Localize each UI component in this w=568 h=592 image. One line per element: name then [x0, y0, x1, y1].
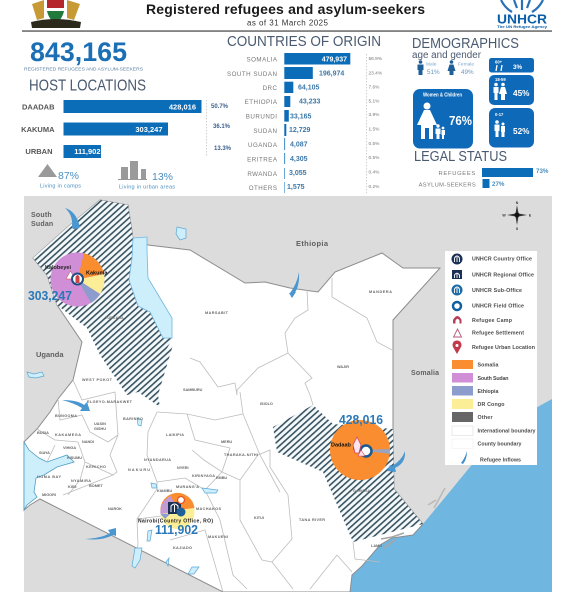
- county labels: KIAMBU: [157, 489, 172, 493]
- bar chart: countries of origin: 0.5%: [368, 155, 380, 161]
- panel: demographics: [412, 36, 534, 148]
- county labels: KAKAMEGA: [55, 433, 81, 437]
- pie: Dadaab: 428,016: [339, 412, 383, 427]
- card: age 0-17: 52%: [513, 126, 530, 136]
- pie: Kakuma: [28, 252, 108, 306]
- stat: male: 51%: [427, 69, 440, 76]
- bar chart: countries of origin: 12,729: [289, 127, 311, 134]
- legend: labels: [472, 256, 536, 464]
- county boundaries: [37, 278, 392, 592]
- county labels: NAROK: [108, 507, 122, 511]
- county labels: MARSABIT: [205, 311, 229, 315]
- country labels: South: [31, 212, 52, 219]
- bar chart: host locations: 111,902: [74, 147, 100, 156]
- county labels: BOMET: [89, 484, 103, 488]
- heading: legal status: LEGAL STATUS: [414, 149, 507, 165]
- bar chart: legal status: [419, 168, 549, 188]
- bar chart: countries of origin: 4,305: [290, 156, 308, 163]
- county labels: VIHIGA: [63, 446, 76, 450]
- county labels: UASIN: [94, 422, 106, 426]
- heading: demographics: DEMOGRAPHICS: [412, 36, 519, 52]
- legend: labels: UNHCR Field Office: [472, 304, 524, 310]
- legend: labels: UNHCR Regional Office: [472, 272, 534, 278]
- country labels: [31, 212, 439, 377]
- county labels: ELGEYO-MARAKWET: [87, 400, 133, 404]
- panel: host locations: [21, 78, 232, 190]
- sea: [350, 399, 552, 592]
- county labels: WAJIR: [337, 365, 349, 369]
- heading: countries of origin: COUNTRIES OF ORIGIN: [227, 34, 381, 50]
- icon: compass: E: [529, 214, 532, 218]
- pie: Nairobi: [138, 493, 213, 537]
- headline total: REGISTERED REFUGEES AND ASYLUM-SEEKERS: [24, 66, 143, 72]
- host location percentages: [206, 100, 232, 157]
- county labels: MAKUENI: [208, 535, 228, 539]
- legend: labels: Refugee Settlement: [472, 330, 524, 336]
- legend: [445, 251, 537, 465]
- card: women and children: 76%: [449, 114, 472, 128]
- county labels: GISHU: [94, 427, 106, 431]
- county labels: KITUI: [254, 516, 264, 520]
- stat: living in urban areas: 13%: [152, 171, 173, 183]
- bar chart: countries of origin: SOUTH SUDAN: [227, 71, 278, 78]
- legend: labels: International boundary: [478, 428, 536, 434]
- legend: labels: Refugee Urban Location: [472, 345, 535, 351]
- legend: labels: UNHCR Sub-Office: [472, 288, 522, 294]
- legend: labels: Ethiopia: [478, 389, 499, 395]
- host location percentages: 36.1%: [213, 124, 231, 130]
- county labels: NAKURU: [128, 468, 150, 472]
- icon: compass: S: [516, 227, 519, 231]
- arrow: Tanzania inflow: [85, 528, 116, 540]
- country labels: Somalia: [411, 370, 439, 377]
- county labels: KERICHO: [86, 465, 106, 469]
- panel: countries of origin: [227, 34, 383, 193]
- county labels: NANDI: [82, 440, 94, 444]
- bar chart: countries of origin: SOMALIA: [246, 56, 278, 64]
- county labels: [37, 290, 392, 550]
- stat: living in urban areas: Living in urban areas: [119, 184, 175, 190]
- pie: Dadaab: Dadaab: [331, 442, 352, 448]
- icon: UNHCR logo: The UN Refugee Agency: [497, 24, 548, 29]
- card: age 18-59: 18-59: [495, 77, 506, 82]
- card: age 60+: 3%: [513, 64, 523, 71]
- bar chart: countries of origin: UGANDA: [248, 142, 278, 149]
- bar chart: countries of origin: OTHERS: [249, 185, 278, 192]
- bar chart: host locations: DAADAB: [22, 102, 55, 112]
- title: Registered refugees and asylum-seekers: [146, 1, 425, 17]
- bar chart: countries of origin: 64,105: [298, 84, 320, 92]
- map background: [24, 196, 552, 592]
- map of Kenya: [24, 196, 552, 592]
- county labels: NYAMIRA: [71, 479, 91, 483]
- county labels: ISIOLO: [260, 402, 273, 406]
- bar chart: countries of origin: 4,087: [290, 142, 308, 148]
- county labels: NYANDARUA: [144, 458, 171, 462]
- pie: Kakuma: Kalobeyei: [45, 265, 71, 271]
- bar chart: countries of origin: 3.9%: [368, 112, 380, 118]
- country labels: Ethiopia: [296, 239, 329, 248]
- country labels: Sudan: [31, 221, 53, 228]
- icon: compass: W: [502, 214, 506, 218]
- icon: compass: [502, 201, 532, 231]
- county labels: EMBU: [216, 476, 227, 480]
- pie: Nairobi: Nairobi(Country Office, RO): [138, 518, 213, 524]
- county labels: GARISSA: [353, 489, 371, 493]
- bar chart: legal status: 73%: [536, 168, 549, 175]
- bar chart: legal status: REFUGEES: [438, 171, 476, 177]
- county labels: THARAKA-NITHI: [224, 453, 258, 457]
- bar chart: countries of origin: 1,575: [287, 184, 305, 191]
- stat: female: 49%: [461, 69, 474, 76]
- panel: legal status: [414, 149, 549, 188]
- icon: compass: N: [516, 201, 519, 205]
- county labels: KAJIADO: [173, 546, 192, 550]
- county labels: KISII: [68, 485, 76, 489]
- icon: tent: [38, 164, 57, 177]
- heading: host locations: HOST LOCATIONS: [29, 78, 146, 94]
- host location percentages: 13.3%: [214, 146, 232, 152]
- bar chart: host locations: KAKUMA: [21, 125, 55, 134]
- bar chart: countries of origin: RWANDA: [247, 171, 278, 178]
- legend: labels: Somalia: [478, 362, 499, 368]
- bar chart: host locations: URBAN: [25, 147, 52, 156]
- county labels: TURKANA: [105, 316, 124, 320]
- bar chart: countries of origin: 3,055: [289, 170, 307, 177]
- legend: labels: DR Congo: [478, 402, 505, 408]
- icon: UNHCR logo: [497, 0, 548, 29]
- stat: living in camps: 87%: [58, 170, 79, 182]
- county labels: MANDERA: [369, 290, 392, 294]
- bar chart: countries of origin: ERITREA: [247, 156, 278, 164]
- card: age 18-59: [489, 75, 534, 105]
- card: women and children: [413, 89, 473, 148]
- card: age 60+: 60+: [495, 60, 503, 64]
- icon: Kenya coat of arms: [31, 0, 81, 28]
- bar chart: countries of origin: 33,165: [290, 114, 312, 120]
- bar chart: countries of origin: 43,233: [299, 98, 321, 106]
- host location percentages: 50.7%: [211, 104, 229, 110]
- stat: living in camps: Living in camps: [40, 184, 81, 190]
- pie: Nairobi: 111,902: [155, 522, 198, 537]
- stat: male: [418, 60, 440, 76]
- pie: Dadaab: [330, 412, 390, 480]
- bar chart: countries of origin: 5.1%: [368, 98, 380, 104]
- bar chart: countries of origin: SUDAN: [253, 128, 278, 135]
- county labels: LAMU: [371, 544, 382, 548]
- bar chart: countries of origin: 479,937: [322, 56, 347, 64]
- bar chart: countries of origin: 7.6%: [368, 84, 380, 90]
- legend: labels: Other: [478, 415, 492, 421]
- legend: swatches: [452, 360, 473, 464]
- legend: labels: Refugee Inflows: [480, 458, 521, 464]
- stat: female: [448, 60, 474, 76]
- county labels: MURANG'A: [176, 485, 199, 489]
- bar chart: countries of origin: 56.9%: [368, 56, 383, 62]
- lake Turkana: [129, 237, 172, 338]
- arrow: Ethiopia inflow: [289, 272, 299, 298]
- bar chart: countries of origin: 23.4%: [368, 70, 383, 76]
- stat: female: Female: [458, 62, 474, 68]
- hatched area: Turkana: [33, 200, 173, 407]
- stat: living in urban areas: [119, 171, 175, 190]
- icon: buildings: [118, 161, 147, 180]
- county labels: MIGORI: [42, 493, 56, 497]
- card: age 18-59: 45%: [513, 88, 530, 98]
- bar chart: legal status: ASYLUM-SEEKERS: [419, 182, 476, 188]
- bar chart: countries of origin: ETHIOPIA: [245, 99, 278, 106]
- county labels: NYERI: [177, 466, 189, 470]
- county labels: WEST POKOT: [82, 378, 113, 382]
- bar chart: legal status: 27%: [492, 181, 505, 188]
- county labels: MERU: [221, 440, 232, 444]
- county labels: SIAYA: [39, 451, 50, 455]
- stat: male: Male: [426, 62, 437, 68]
- bar chart: countries of origin: 1.5%: [368, 126, 380, 132]
- bar chart: countries of origin: 196,974: [319, 70, 344, 78]
- hatched area: Garissa: [273, 405, 423, 542]
- county labels: LAIKIPIA: [166, 433, 184, 437]
- pie: Kakuma: 303,247: [28, 288, 72, 303]
- bar chart: host locations: 428,016: [169, 102, 196, 112]
- lake Victoria: [24, 442, 74, 510]
- legend: labels: County boundary: [478, 442, 522, 448]
- small lakes: [27, 227, 218, 574]
- county labels: BUSIA: [37, 431, 49, 435]
- county labels: KISUMU: [67, 456, 82, 460]
- bar chart: countries of origin: 0.2%: [368, 184, 380, 190]
- county labels: BARINGO: [123, 417, 143, 421]
- bar chart: host locations: [21, 100, 202, 158]
- bar chart: countries of origin: BURUNDI: [246, 114, 278, 120]
- subtitle: date: as of 31 March 2025: [247, 18, 329, 28]
- card: age 60+: [489, 58, 534, 72]
- county labels: MACHAKOS: [196, 507, 221, 511]
- legend: labels: UNHCR Country Office: [472, 256, 532, 262]
- county labels: BUNGOMA: [55, 414, 77, 418]
- bar chart: host locations: 303,247: [135, 125, 162, 134]
- Kenya territory: [24, 200, 440, 592]
- arrow: Somalia inflow: [387, 451, 405, 472]
- county labels: TANA RIVER: [299, 518, 325, 522]
- bar chart: countries of origin: 0.4%: [368, 170, 380, 176]
- country labels: Uganda: [36, 350, 64, 359]
- bar chart: countries of origin: [227, 53, 383, 193]
- card: women and children: Women & Children: [423, 92, 462, 98]
- arrow: South Sudan inflow: [65, 208, 80, 229]
- county labels: SAMBURU: [183, 388, 203, 392]
- card: age 0-17: 0-17: [495, 112, 504, 117]
- arrow: Uganda inflow: [62, 400, 90, 411]
- headline total: 843,165: [30, 37, 127, 67]
- icon: UNHCR logo: UNHCR: [497, 12, 547, 26]
- stat: living in camps: [40, 170, 81, 190]
- county labels: HOMA BAY: [37, 475, 61, 479]
- bar chart: countries of origin: 0.5%: [368, 141, 380, 147]
- legend: labels: South Sudan: [478, 376, 508, 382]
- bar chart: countries of origin: DRC: [263, 85, 278, 92]
- legend: office and camp icons: [452, 254, 462, 354]
- subheading: age and gender: age and gender: [412, 50, 482, 61]
- legend: labels: Refugee Camp: [472, 318, 513, 324]
- pie: Kakuma: Kakuma: [86, 270, 108, 276]
- county labels: KIRINYAGA: [192, 474, 215, 478]
- card: age 0-17: [489, 108, 534, 148]
- coastal detail: [381, 533, 404, 548]
